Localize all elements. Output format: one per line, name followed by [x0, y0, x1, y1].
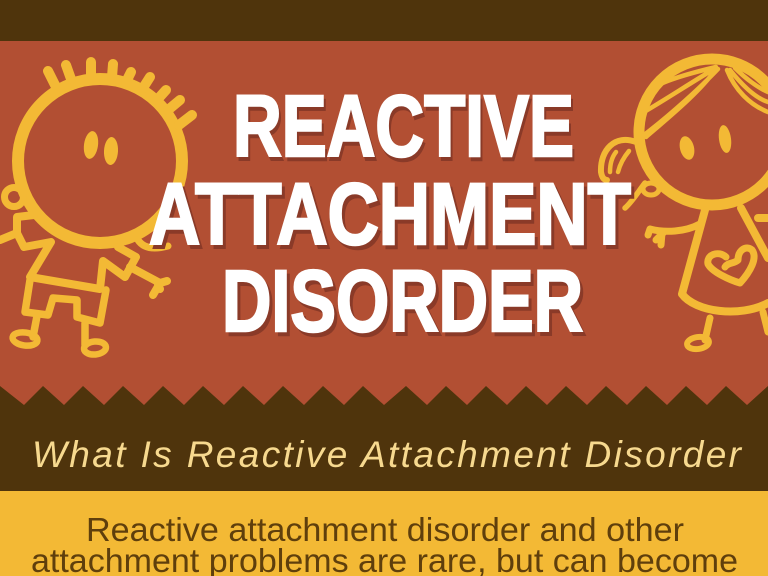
panel: red title background	[0, 41, 768, 391]
panel: top dark band	[0, 0, 768, 41]
subtitle: What Is Reactive Attachment Disorder	[32, 434, 743, 475]
panel: yellow text band	[0, 491, 768, 576]
title text: ATTACHMENT	[149, 166, 631, 263]
body text: Reactive attachment disorder and other	[86, 511, 684, 548]
panel: dark zigzag band	[0, 386, 768, 492]
title text: DISORDER	[222, 253, 583, 350]
title shadow: DISORDER	[225, 257, 586, 354]
icon: girl line drawing	[601, 59, 768, 350]
title text	[149, 78, 631, 350]
title shadow	[152, 82, 634, 354]
title shadow: REACTIVE	[235, 82, 576, 179]
title	[149, 78, 634, 354]
title text: REACTIVE	[233, 78, 574, 175]
icon: boy line drawing	[0, 62, 192, 355]
title shadow: ATTACHMENT	[152, 170, 634, 267]
body text	[31, 511, 738, 576]
